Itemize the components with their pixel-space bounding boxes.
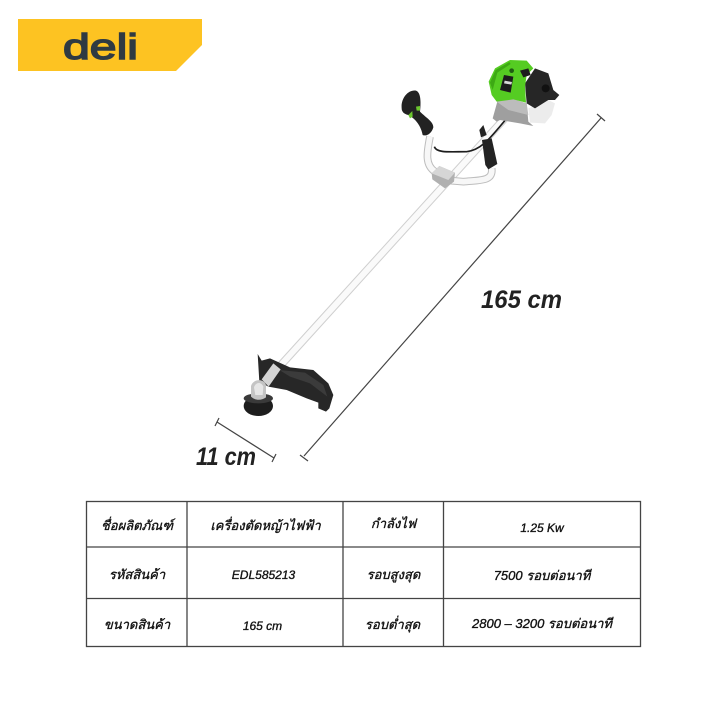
- cable: [434, 117, 508, 152]
- table cell: max speed label: รอบสูงสุด: [367, 567, 420, 582]
- logo: deli: deli: [63, 26, 138, 67]
- guard: [258, 354, 333, 412]
- table cell: min speed value: 2800 – 3200 รอบต่อนาที: [472, 616, 612, 631]
- green engine cover: [489, 60, 533, 103]
- table cell: size label: ขนาดสินค้า: [104, 617, 170, 632]
- product: brush cutter shaft: [280, 118, 505, 366]
- dimension line: width 11 cm: [215, 418, 276, 462]
- label: 11 cm: 11 cm: [196, 443, 256, 471]
- table cell: max speed value: 7500 รอบต่อนาที: [494, 568, 590, 583]
- black air filter housing: [525, 68, 559, 108]
- table cell: power label: กำลังไฟ: [371, 516, 416, 531]
- dimension line: length 165 cm: [300, 114, 605, 461]
- table cell: size value: 165 cm: [243, 618, 282, 632]
- table cell: product name: เครื่องตัดหญ้าไฟฟ้า: [210, 518, 321, 533]
- table cell: power value: 1.25 Kw: [520, 520, 564, 534]
- label: 165 cm: 165 cm: [481, 286, 562, 314]
- clamp: [432, 166, 455, 188]
- left grip: [402, 91, 433, 135]
- table cell: product name label: ชื่อผลิตภัณฑ์: [101, 518, 173, 533]
- product: engine and handle: [402, 60, 559, 188]
- label plate: [500, 75, 513, 93]
- table grid: [86, 501, 641, 647]
- spool: [244, 396, 273, 416]
- right grip: [482, 138, 497, 169]
- table cell: min speed label: รอบต่ำสุด: [365, 617, 420, 632]
- table cell: code value: EDL585213: [232, 568, 295, 582]
- handlebar: [427, 137, 492, 182]
- white tank: [528, 100, 555, 123]
- product: trimmer head and guard: [244, 354, 333, 416]
- lower shaft collar: [262, 363, 281, 387]
- logo: deli: [18, 19, 202, 71]
- gearbox: [493, 102, 533, 126]
- table cell: code label: รหัสสินค้า: [109, 567, 165, 582]
